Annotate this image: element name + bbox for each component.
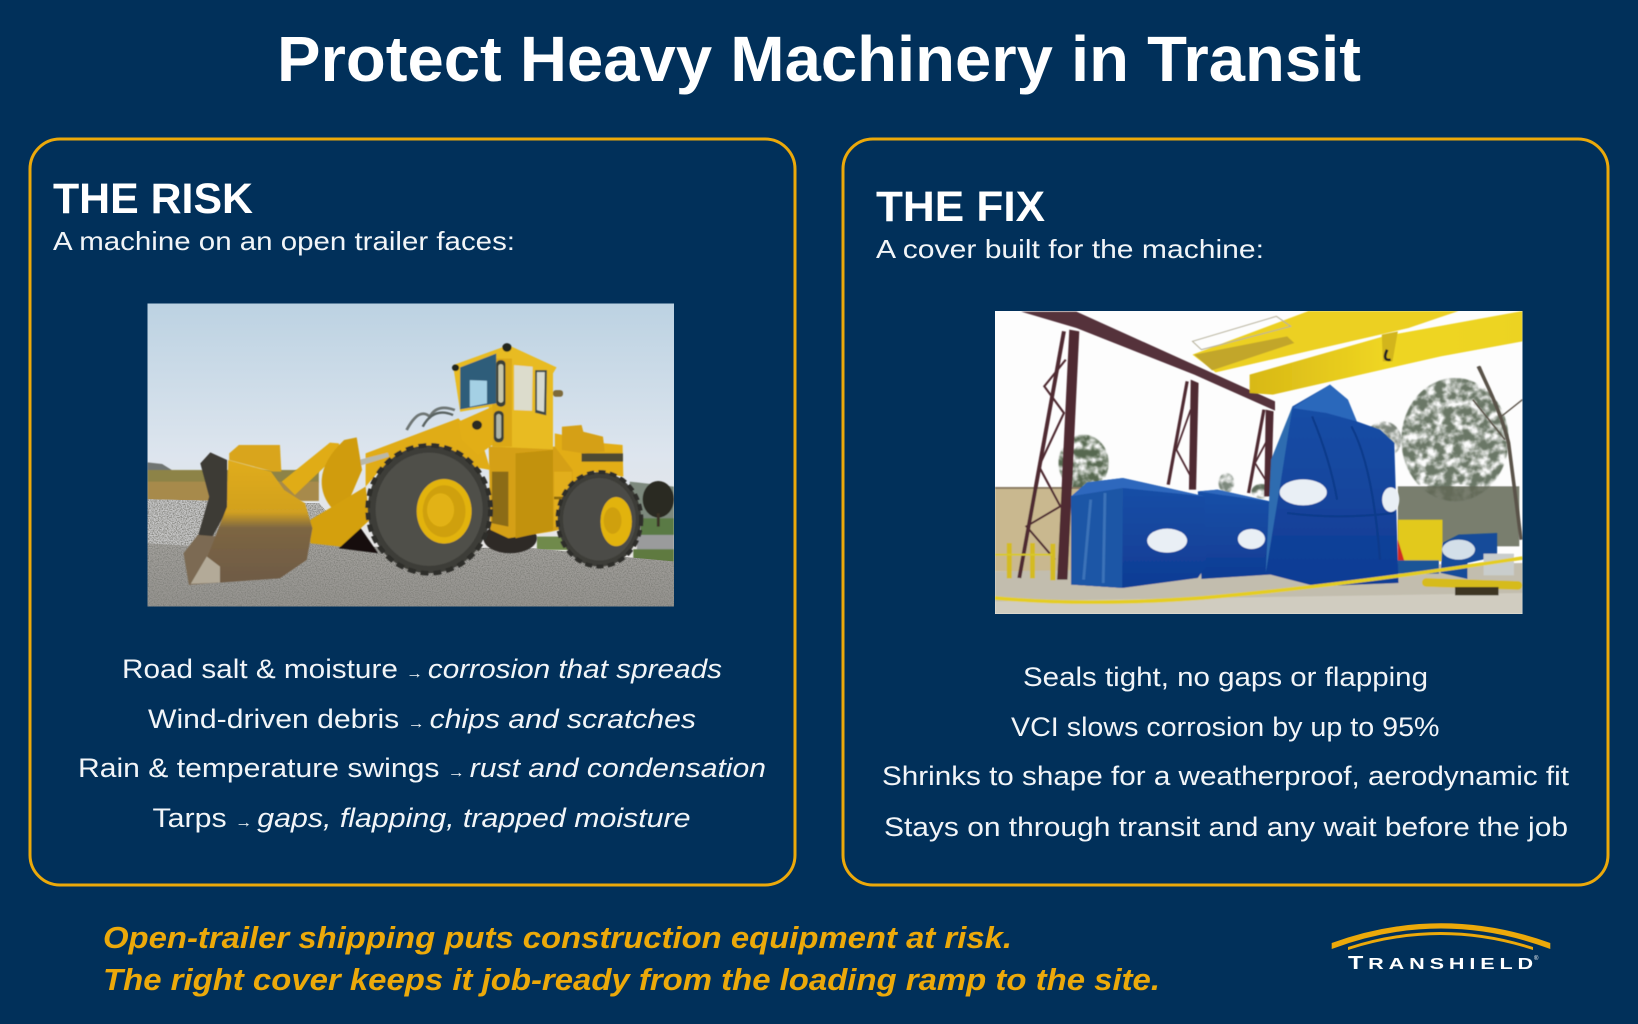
- registered mark: ®: [1534, 955, 1539, 962]
- rear tyre: [558, 472, 641, 567]
- trees: [1059, 378, 1509, 501]
- photo: yellow wheel loader on gravel: [148, 304, 674, 606]
- hoses: [407, 408, 455, 430]
- arm: [366, 418, 491, 487]
- fix list: [882, 662, 1570, 842]
- caution tape: [995, 558, 1522, 602]
- yellow crane: [1192, 311, 1459, 372]
- title: Protect Heavy Machinery in Transit: [277, 23, 1361, 95]
- fix item: VCI: VCI slows corrosion by up to 95%: [1011, 712, 1440, 742]
- panel: the fix: [843, 139, 1608, 885]
- risk item: wind debris: Wind-driven debris → chips and scratches: [148, 704, 696, 734]
- footer statement: [103, 920, 1160, 997]
- logo arcs: [1332, 923, 1550, 950]
- subheading: risk: A machine on an open trailer faces:: [53, 226, 515, 256]
- footer line 2: The right cover keeps it job-ready from the loading ramp to the site.: [103, 962, 1160, 997]
- yellow machine and blue container: [1398, 520, 1442, 561]
- risk item: tarps: Tarps → gaps, flapping, trapped moisture: [152, 803, 690, 833]
- pipes on ground: [1422, 578, 1522, 590]
- rear shadow: [339, 525, 378, 553]
- subheading: fix: A cover built for the machine:: [876, 234, 1264, 264]
- panel: the risk: [30, 139, 795, 885]
- fence left: [1007, 543, 1012, 578]
- risk item: road salt: Road salt & moisture → corrosion that spreads: [122, 654, 722, 684]
- fix item: seals: Seals tight, no gaps or flapping: [1023, 662, 1428, 692]
- blue box 1: [1071, 478, 1206, 588]
- logo wordmark: T RANSHIELD: [1348, 953, 1538, 973]
- heading: the fix: THE FIX: [876, 183, 1045, 231]
- blue box 2: [1198, 490, 1270, 579]
- fix item: stays: Stays on through transit and any wait before the job: [884, 812, 1568, 842]
- bucket: [198, 452, 227, 538]
- ground: [148, 499, 674, 606]
- panel border: risk: [30, 139, 795, 885]
- footer line 1: Open-trailer shipping puts construction equipment at risk.: [103, 920, 1012, 955]
- logo: Transhield: [1332, 923, 1550, 973]
- rear body: [555, 433, 623, 487]
- building and ground: [995, 488, 1081, 571]
- tall blue cover: [1264, 385, 1399, 586]
- heading: the risk: THE RISK: [53, 175, 253, 223]
- panel border: fix: [843, 139, 1608, 885]
- risk list: [78, 654, 766, 833]
- cab: [453, 345, 557, 449]
- photo: blue shrink-wrapped machines under gantry crane: [995, 311, 1522, 614]
- steel frame: [1019, 312, 1275, 580]
- risk item: rain: Rain & temperature swings → rust and condensation: [78, 753, 766, 783]
- frame and step: [489, 447, 573, 538]
- fix item: shrinks: Shrinks to shape for a weatherproof, aerodynamic fit: [882, 761, 1570, 791]
- front tyre: [368, 445, 491, 573]
